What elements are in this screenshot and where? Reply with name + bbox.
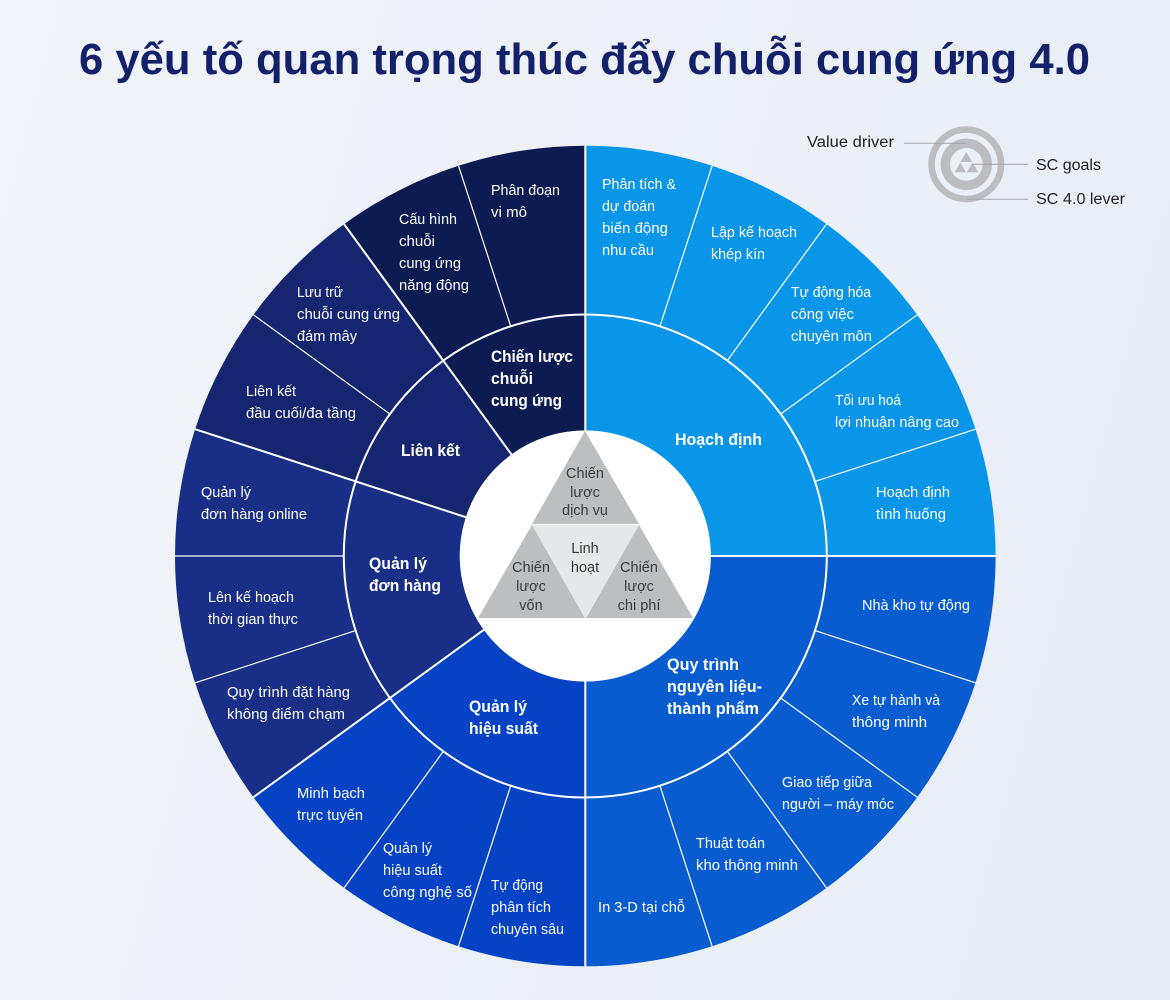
panel: Quản lý đơn hàng <box>175 429 484 797</box>
heading: Chiến lược chuỗi cung ứng: Chiến lược <box>491 348 573 366</box>
text: Hoạch định tình huống: Hoạch định <box>876 484 950 501</box>
heading: Quy trình nguyên liệu-thành phẩm: thành phẩm <box>667 700 759 718</box>
text: Quy trình đặt hàng không điểm chạm: không điểm chạm <box>227 706 345 723</box>
text: Tự động hóa công việc chuyên môn: công việc <box>791 306 854 323</box>
heading: Quy trình nguyên liệu-thành phẩm: Quy trình <box>667 656 739 674</box>
text: Thuật toán kho thông minh: Thuật toán <box>696 835 765 852</box>
panel: Hoạch định <box>585 146 996 556</box>
text: Quản lý hiệu suất công nghệ số <box>383 840 473 901</box>
heading: Quản lý hiệu suất: hiệu suất <box>469 720 538 738</box>
title: 6 yếu tố quan trọng thúc đẩy chuỗi cung ứng 4.0 <box>79 34 1090 84</box>
text: Minh bạch trực tuyến: trực tuyến <box>297 807 363 824</box>
text: Thuật toán kho thông minh: kho thông minh <box>696 857 798 874</box>
triangle: Chiến lược dịch vụ: dịch vụ <box>562 503 608 519</box>
heading: Chiến lược chuỗi cung ứng: chuỗi <box>491 369 533 388</box>
text: Lập kế hoạch khép kín <box>711 224 797 263</box>
text: Liên kết đầu cuối/đa tầng <box>246 383 356 422</box>
text: Hoạch định tình huống <box>876 484 950 523</box>
panel: Liên kết <box>195 224 512 517</box>
triangle: Chiến lược dịch vụ <box>532 431 639 524</box>
heading: Quy trình nguyên liệu-thành phẩm: nguyên liệu- <box>667 678 762 696</box>
text: Phân tích và dự đoán biến động nhu cầu: Phân tích & <box>602 176 676 193</box>
text: Cấu hình chuỗi cung ứng năng động: Cấu hình <box>399 211 457 228</box>
text: Phân tích và dự đoán biến động nhu cầu: dự đoán <box>602 198 655 215</box>
legend leader lines <box>904 143 1028 199</box>
panel: Chiến lược chuỗi cung ứng <box>344 146 585 454</box>
text: Tự động phân tích chuyên sâu: chuyên sâu <box>491 921 564 938</box>
text: Quản lý hiệu suất công nghệ số: hiệu suất <box>383 862 443 879</box>
text: Cấu hình chuỗi cung ứng năng động: chuỗi <box>399 233 435 250</box>
text: Quy trình đặt hàng không điểm chạm: Quy trình đặt hàng <box>227 684 350 701</box>
text: Xe tự hành và thông minh: thông minh <box>852 714 927 731</box>
text: Minh bạch trực tuyến: Minh bạch <box>297 785 365 802</box>
triangle: Chiến lược chi phí: chi phí <box>618 598 660 614</box>
text: Tối ưu hoá lợi nhuận nâng cao <box>835 392 959 431</box>
heading: Liên kết: Liên kết <box>401 442 460 460</box>
triangle: Chiến lược vốn: lược <box>516 579 546 595</box>
legend label: SC goals: SC goals <box>1036 157 1101 174</box>
text: Tự động phân tích chuyên sâu: phân tích <box>491 899 551 916</box>
text: Cấu hình chuỗi cung ứng năng động: cung ứng <box>399 255 461 272</box>
text: Liên kết đầu cuối/đa tầng: đầu cuối/đa tầng <box>246 405 356 422</box>
triangle: Chiến lược dịch vụ: Chiến <box>566 466 604 482</box>
triangle: Chiến lược chi phí <box>586 525 693 618</box>
text: Minh bạch trực tuyến <box>297 785 365 824</box>
text: Cấu hình chuỗi cung ứng năng động <box>399 211 469 294</box>
text: Tối ưu hoá lợi nhuận nâng cao: lợi nhuận nâng cao <box>835 414 959 431</box>
text: Hoạch định tình huống: tình huống <box>876 506 946 523</box>
text: Thuật toán kho thông minh <box>696 835 798 874</box>
triangle: Linh hoạt: Linh <box>571 541 599 557</box>
wheel chart <box>175 146 996 966</box>
heading: Quản lý đơn hàng: đơn hàng <box>369 577 441 595</box>
text: Tự động phân tích chuyên sâu <box>491 877 564 938</box>
text: Liên kết đầu cuối/đa tầng: Liên kết <box>246 383 297 400</box>
triangle: Chiến lược chi phí: lược <box>624 579 654 595</box>
triangle: Chiến lược dịch vụ: lược <box>570 485 600 501</box>
panel: Quy trình nguyên liệu-thành phẩm <box>585 556 996 966</box>
text: Tự động hóa công việc chuyên môn <box>791 284 872 345</box>
text: Quản lý đơn hàng online: Quản lý <box>201 484 251 501</box>
text: In 3-D tại chỗ: In 3-D tại chỗ <box>598 899 685 916</box>
ring dividers <box>175 146 996 966</box>
text: Phân đoạn vi mô <box>491 182 560 221</box>
text: Giao tiếp giữa người – máy móc: Giao tiếp giữa <box>782 774 873 791</box>
center circle <box>460 430 711 682</box>
heading: Quy trình nguyên liệu-thành phẩm <box>667 656 762 718</box>
text: Quy trình đặt hàng không điểm chạm <box>227 684 350 723</box>
text: Tự động hóa công việc chuyên môn: chuyên môn <box>791 328 872 345</box>
heading: Quản lý đơn hàng <box>369 555 441 595</box>
triangle: Chiến lược vốn <box>478 525 585 618</box>
heading: Hoạch định: Hoạch định <box>675 431 762 449</box>
text: Tự động hóa công việc chuyên môn: Tự động hóa <box>791 284 872 301</box>
triangle: Chiến lược vốn: vốn <box>519 598 543 614</box>
text: Giao tiếp giữa người – máy móc: người – máy móc <box>782 796 894 813</box>
heading: Chiến lược chuỗi cung ứng: cung ứng <box>491 392 562 410</box>
heading: Quản lý hiệu suất <box>469 698 538 738</box>
text: Quản lý hiệu suất công nghệ số: Quản lý <box>383 840 432 857</box>
text: Lên kế hoạch thời gian thực: Lên kế hoạch <box>208 589 294 606</box>
heading: Chiến lược chuỗi cung ứng <box>491 348 573 410</box>
icon: legend target <box>932 130 1001 199</box>
heading: Quản lý hiệu suất: Quản lý <box>469 698 528 716</box>
text: Phân tích và dự đoán biến động nhu cầu: biến động <box>602 220 668 237</box>
triangle: Linh hoạt <box>532 525 639 618</box>
text: Quản lý đơn hàng online <box>201 484 307 523</box>
text: Lưu trữ chuỗi cung ứng đám mây: đám mây <box>297 328 357 345</box>
text: Phân tích và dự đoán biến động nhu cầu <box>602 176 676 259</box>
legend label: value driver: Value driver <box>807 134 894 151</box>
legend <box>807 130 1125 208</box>
text: Phân tích và dự đoán biến động nhu cầu: nhu cầu <box>602 242 654 259</box>
triangle: Chiến lược chi phí: Chiến <box>620 560 658 576</box>
panel: Quản lý hiệu suất <box>253 630 585 966</box>
text: Lên kế hoạch thời gian thực: thời gian thực <box>208 611 298 628</box>
text: Lưu trữ chuỗi cung ứng đám mây: chuỗi cung ứng <box>297 306 400 323</box>
text: Quản lý hiệu suất công nghệ số: công nghệ số <box>383 884 473 901</box>
text: Cấu hình chuỗi cung ứng năng động: năng động <box>399 277 469 294</box>
text: Quản lý đơn hàng online: đơn hàng online <box>201 506 307 523</box>
text: Tự động phân tích chuyên sâu: Tự động <box>491 877 543 894</box>
text: Giao tiếp giữa người – máy móc <box>782 774 894 813</box>
triangle: Chiến lược vốn: Chiến <box>512 560 550 576</box>
text: Lưu trữ chuỗi cung ứng đám mây: Lưu trữ <box>297 284 343 301</box>
text: Phân đoạn vi mô: Phân đoạn <box>491 182 560 199</box>
text: Lưu trữ chuỗi cung ứng đám mây <box>297 284 400 345</box>
text: Nhà kho tự động: Nhà kho tự động <box>862 597 970 614</box>
text: Xe tự hành và thông minh: Xe tự hành và <box>852 692 941 709</box>
text: Lên kế hoạch thời gian thực <box>208 589 298 628</box>
legend label: SC 4.0 lever: SC 4.0 lever <box>1036 191 1125 208</box>
text: Xe tự hành và thông minh <box>852 692 941 731</box>
triangle: Linh hoạt: hoạt <box>571 560 599 576</box>
text: Tối ưu hoá lợi nhuận nâng cao: Tối ưu hoá <box>835 392 902 409</box>
text: Phân đoạn vi mô: vi mô <box>491 204 527 221</box>
heading: Quản lý đơn hàng: Quản lý <box>369 555 428 573</box>
text: Lập kế hoạch khép kín: Lập kế hoạch <box>711 224 797 241</box>
text: Lập kế hoạch khép kín: khép kín <box>711 246 765 263</box>
